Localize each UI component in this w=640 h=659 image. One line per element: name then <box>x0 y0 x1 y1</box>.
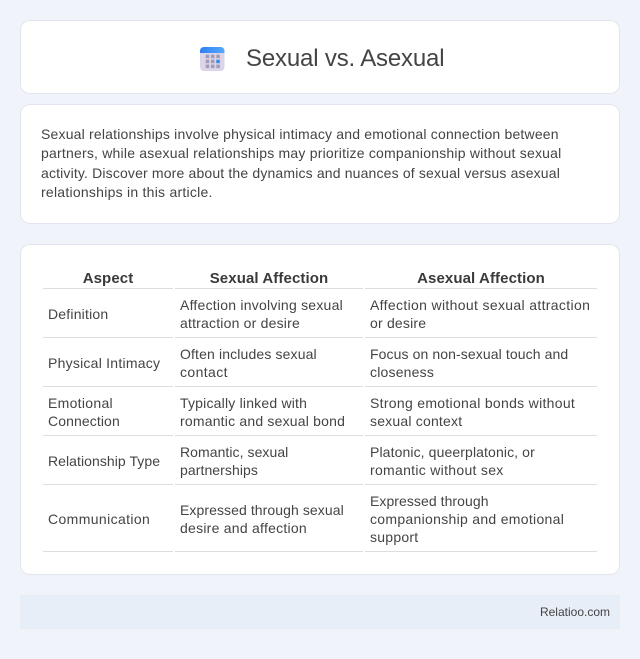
row: relationship type: partnerships <box>180 462 258 478</box>
row: relationship type: Relationship Type <box>48 453 160 469</box>
footer credit: Relatioo.com <box>540 605 610 619</box>
row: communication: Expressed through <box>370 493 489 509</box>
row: communication: companionship and emotional <box>370 511 564 527</box>
row: emotional connection: Connection <box>48 413 120 429</box>
row: physical intimacy <box>48 346 568 380</box>
row: communication: Expressed through sexual <box>180 502 344 518</box>
title: Sexual vs. Asexual <box>246 45 444 72</box>
panel: comparison table <box>20 244 620 575</box>
footer bar <box>20 595 620 629</box>
row: communication: desire and affection <box>180 520 307 536</box>
panel: intro text <box>20 104 620 224</box>
row: definition: or desire <box>370 315 426 331</box>
row: emotional connection: Emotional <box>48 395 113 411</box>
table header <box>83 270 545 287</box>
row: physical intimacy: closeness <box>370 364 434 380</box>
intro paragraph: relationships in this article. <box>41 184 213 200</box>
intro paragraph: partners, while asexual relationships may prioritize companionship without sexual <box>41 145 561 161</box>
row: communication: support <box>370 529 418 545</box>
row: emotional connection: Typically linked with <box>180 395 307 411</box>
row: physical intimacy: Focus on non-sexual touch and <box>370 346 568 362</box>
row: physical intimacy: Often includes sexual <box>180 346 317 362</box>
row: definition <box>48 297 590 331</box>
table header: Aspect <box>83 270 133 287</box>
intro paragraph <box>41 126 561 200</box>
row: relationship type <box>48 444 535 478</box>
row: relationship type: Romantic, sexual <box>180 444 288 460</box>
row: definition: Definition <box>48 306 108 322</box>
row: emotional connection: romantic and sexual bond <box>180 413 345 429</box>
row: relationship type: Platonic, queerplatonic, or <box>370 444 535 460</box>
row: emotional connection: Strong emotional bonds without <box>370 395 575 411</box>
icon: calendar <box>200 47 224 71</box>
table header: Sexual Affection <box>210 270 328 287</box>
panel: title card <box>20 20 620 94</box>
intro paragraph: Sexual relationships involve physical intimacy and emotional connection between <box>41 126 559 142</box>
row: definition: attraction or desire <box>180 315 300 331</box>
row: definition: Affection involving sexual <box>180 297 343 313</box>
row: communication: Communication <box>48 511 150 527</box>
table header: Asexual Affection <box>417 270 545 287</box>
intro paragraph: activity. Discover more about the dynamics and nuances of sexual versus asexual <box>41 165 560 181</box>
row: communication <box>48 493 564 545</box>
row: physical intimacy: contact <box>180 364 228 380</box>
row: physical intimacy: Physical Intimacy <box>48 355 160 371</box>
row: emotional connection: sexual context <box>370 413 462 429</box>
row: definition: Affection without sexual attraction <box>370 297 590 313</box>
row: emotional connection <box>48 395 575 429</box>
row: relationship type: romantic without sex <box>370 462 504 478</box>
